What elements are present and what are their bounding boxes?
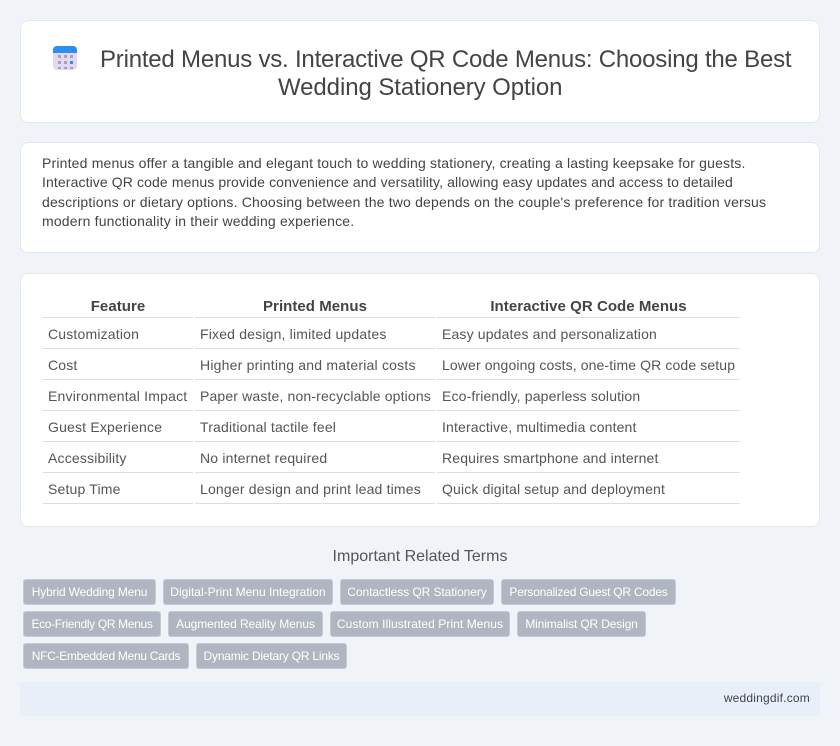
row: environmental impact: Eco-friendly, paperless solution: [442, 388, 640, 404]
row: cost: Higher printing and material costs: [200, 357, 416, 373]
tags: related terms: Custom Illustrated Print Menus: [337, 617, 503, 631]
row: accessibility: No internet required: [200, 450, 327, 466]
row: guest experience: [48, 419, 637, 435]
row: guest experience: Interactive, multimedia content: [442, 419, 637, 435]
tags: related terms: Hybrid Wedding Menu: [32, 585, 147, 599]
row: customization: [48, 326, 657, 342]
row: customization: Easy updates and personalization: [442, 326, 657, 342]
tags: related terms: Dynamic Dietary QR Links: [204, 649, 339, 663]
row: customization: Customization: [48, 326, 139, 342]
title: Printed Menus vs. Interactive QR Code Menus: Choosing the Best: [100, 46, 791, 73]
intro text: [42, 155, 766, 229]
intro text: descriptions or dietary options. Choosing between the two depends on the couple's preference for tradition versus: [42, 194, 766, 210]
row: accessibility: Requires smartphone and internet: [442, 450, 658, 466]
related terms heading: Important Related Terms: [333, 548, 507, 565]
panel: title header: [20, 20, 820, 123]
intro text: modern functionality in their wedding experience.: [42, 213, 354, 229]
panel: introduction: [20, 142, 820, 253]
intro text: Printed menus offer a tangible and elegant touch to wedding stationery, creating a lasting keepsake for guests.: [42, 155, 746, 171]
row: environmental impact: Paper waste, non-recyclable options: [200, 388, 431, 404]
row: accessibility: Accessibility: [48, 450, 127, 466]
icon: calendar: [53, 46, 77, 70]
footer source text: weddingdif.com: [724, 691, 810, 705]
row: cost: [48, 357, 735, 373]
row: customization: Fixed design, limited updates: [200, 326, 387, 342]
tags: related terms: Contactless QR Stationery: [347, 585, 487, 599]
row: setup time: [48, 481, 665, 497]
row: cost: Lower ongoing costs, one-time QR code setup: [442, 357, 735, 373]
table header row: Printed Menus: [263, 298, 367, 315]
panel: comparison table: [20, 273, 820, 527]
row: environmental impact: [48, 388, 640, 404]
tags: related terms: Augmented Reality Menus: [176, 617, 315, 631]
tags: related terms: NFC-Embedded Menu Cards: [32, 649, 180, 663]
title: [100, 46, 792, 101]
row: guest experience: Traditional tactile feel: [200, 419, 336, 435]
title: Wedding Stationery Option: [278, 74, 562, 101]
row: setup time: Longer design and print lead times: [200, 481, 421, 497]
row: setup time: Quick digital setup and deployment: [442, 481, 665, 497]
row: guest experience: Guest Experience: [48, 419, 162, 435]
table header row: Feature: [91, 298, 145, 315]
intro text: Interactive QR code menus provide convenience and versatility, allowing easy updates and access to detailed: [42, 174, 733, 190]
tags: related terms: Personalized Guest QR Codes: [509, 585, 668, 599]
row: setup time: Setup Time: [48, 481, 121, 497]
tags: related terms: Minimalist QR Design: [525, 617, 638, 631]
tags: related terms: Eco-Friendly QR Menus: [31, 617, 153, 631]
tags: related terms: [23, 579, 676, 669]
tags: related terms: Digital-Print Menu Integration: [170, 585, 326, 599]
row: cost: Cost: [48, 357, 78, 373]
row: environmental impact: Environmental Impact: [48, 388, 187, 404]
table header row: Interactive QR Code Menus: [490, 298, 687, 315]
footer bar: [20, 682, 820, 716]
row: accessibility: [48, 450, 658, 466]
table header row: [91, 298, 687, 315]
